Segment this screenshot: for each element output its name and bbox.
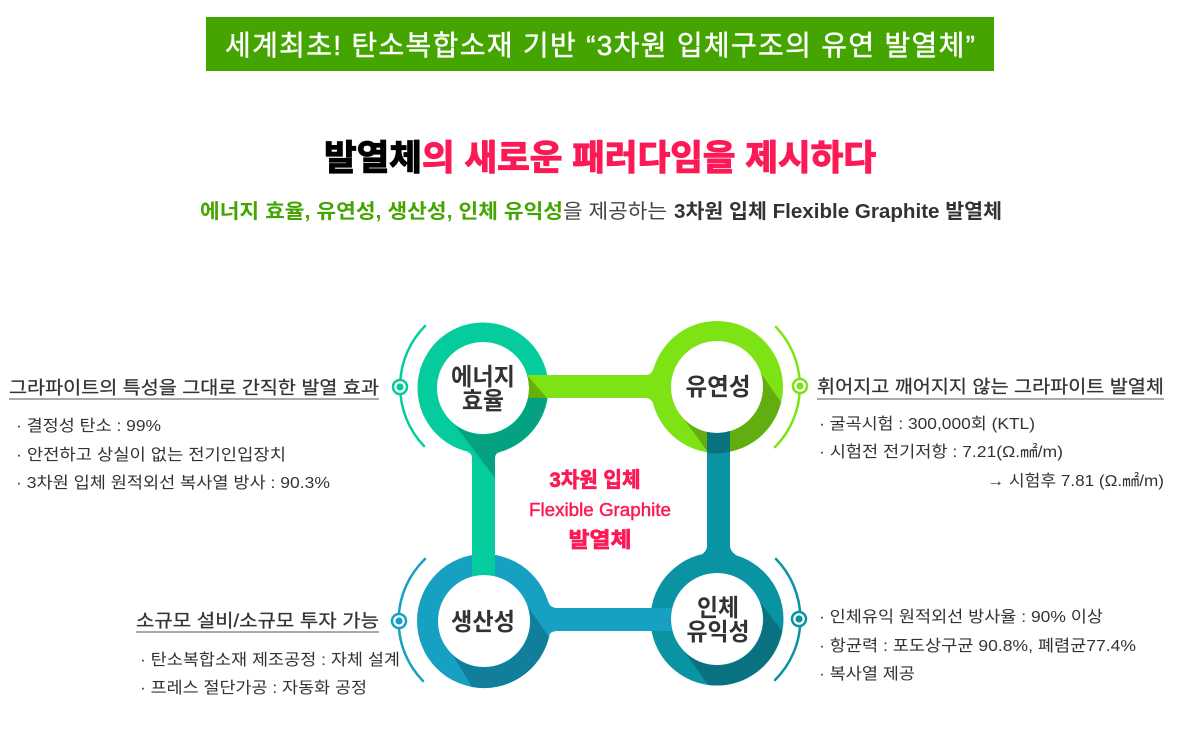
text block: flexibility: → 시험후 7.81 (Ω.㎟/m) [987, 472, 1164, 490]
center label: 3차원 입체 [550, 469, 640, 492]
node shadow: 에너지 효율 [455, 398, 547, 478]
connector: 유연성 to 인체 유익성 [701, 431, 736, 555]
node: 인체 유익성: 유익성 [686, 619, 750, 646]
node: 유연성 [640, 321, 807, 453]
main heading: 발열체의 새로운 패러다임을 제시하다 [324, 139, 876, 178]
connector: 에너지 to 유연성 [527, 375, 655, 398]
title banner: 세계최초! 탄소복합소재 기반 “3차원 입체구조의 유연 발열체” [225, 30, 975, 61]
text block: body benefits: · 복사열 제공 [819, 665, 915, 683]
text block: energy efficiency: 그라파이트의 특성을 그대로 간직한 발열 효과 [9, 378, 379, 398]
subheading: 에너지 효율, 유연성, 생산성, 인체 유익성 [200, 200, 563, 223]
text block: energy efficiency: · 3차원 입체 원적외선 복사열 방사 : 90.3% [16, 474, 330, 492]
text block: productivity: · 프레스 절단가공 : 자동화 공정 [140, 679, 367, 697]
node: 생산성 [392, 554, 557, 688]
node: 에너지 효율: 에너지 [451, 364, 515, 391]
text block: productivity [136, 611, 400, 697]
connector: 생산성 to 인체 유익성 [540, 608, 672, 631]
subheading [200, 200, 1002, 223]
connector: 에너지 to 생산성 [467, 452, 500, 577]
text block: productivity: 소규모 설비/소규모 투자 가능 [136, 611, 379, 631]
text block: flexibility: 휘어지고 깨어지지 않는 그라파이트 발열체 [817, 377, 1164, 397]
subheading: 을 제공하는 [563, 200, 667, 223]
text block: energy efficiency [9, 378, 379, 492]
title banner [206, 17, 994, 71]
text block: body benefits [819, 608, 1136, 683]
text block: body benefits: · 인체유익 원적외선 방사율 : 90% 이상 [819, 608, 1103, 626]
text block: body benefits: · 항균력 : 포도상구균 90.8%, 폐렴균77.4% [819, 637, 1136, 655]
text block: energy efficiency: · 결정성 탄소 : 99% [16, 417, 161, 435]
center label [529, 469, 671, 552]
node: 유연성: 유연성 [686, 374, 750, 401]
text block: flexibility: · 시험전 전기저항 : 7.21(Ω.㎟/m) [819, 443, 1063, 461]
text block: energy efficiency: · 안전하고 상실이 없는 전기인입장치 [16, 446, 286, 464]
text block: flexibility: · 굴곡시험 : 300,000회 (KTL) [819, 415, 1035, 433]
node: 인체 유익성 [650, 552, 806, 686]
node: 에너지 효율: 효율 [462, 388, 504, 415]
center label: 발열체 [568, 529, 632, 552]
node: 에너지 효율 [393, 322, 548, 454]
node: 인체 유익성: 인체 [697, 595, 739, 622]
subheading: 3차원 입체 Flexible Graphite 발열체 [674, 200, 1002, 223]
text block: productivity: · 탄소복합소재 제조공정 : 자체 설계 [140, 651, 400, 669]
text block: flexibility [817, 377, 1164, 490]
node: 생산성: 생산성 [451, 609, 515, 636]
center label: Flexible Graphite [529, 500, 671, 520]
